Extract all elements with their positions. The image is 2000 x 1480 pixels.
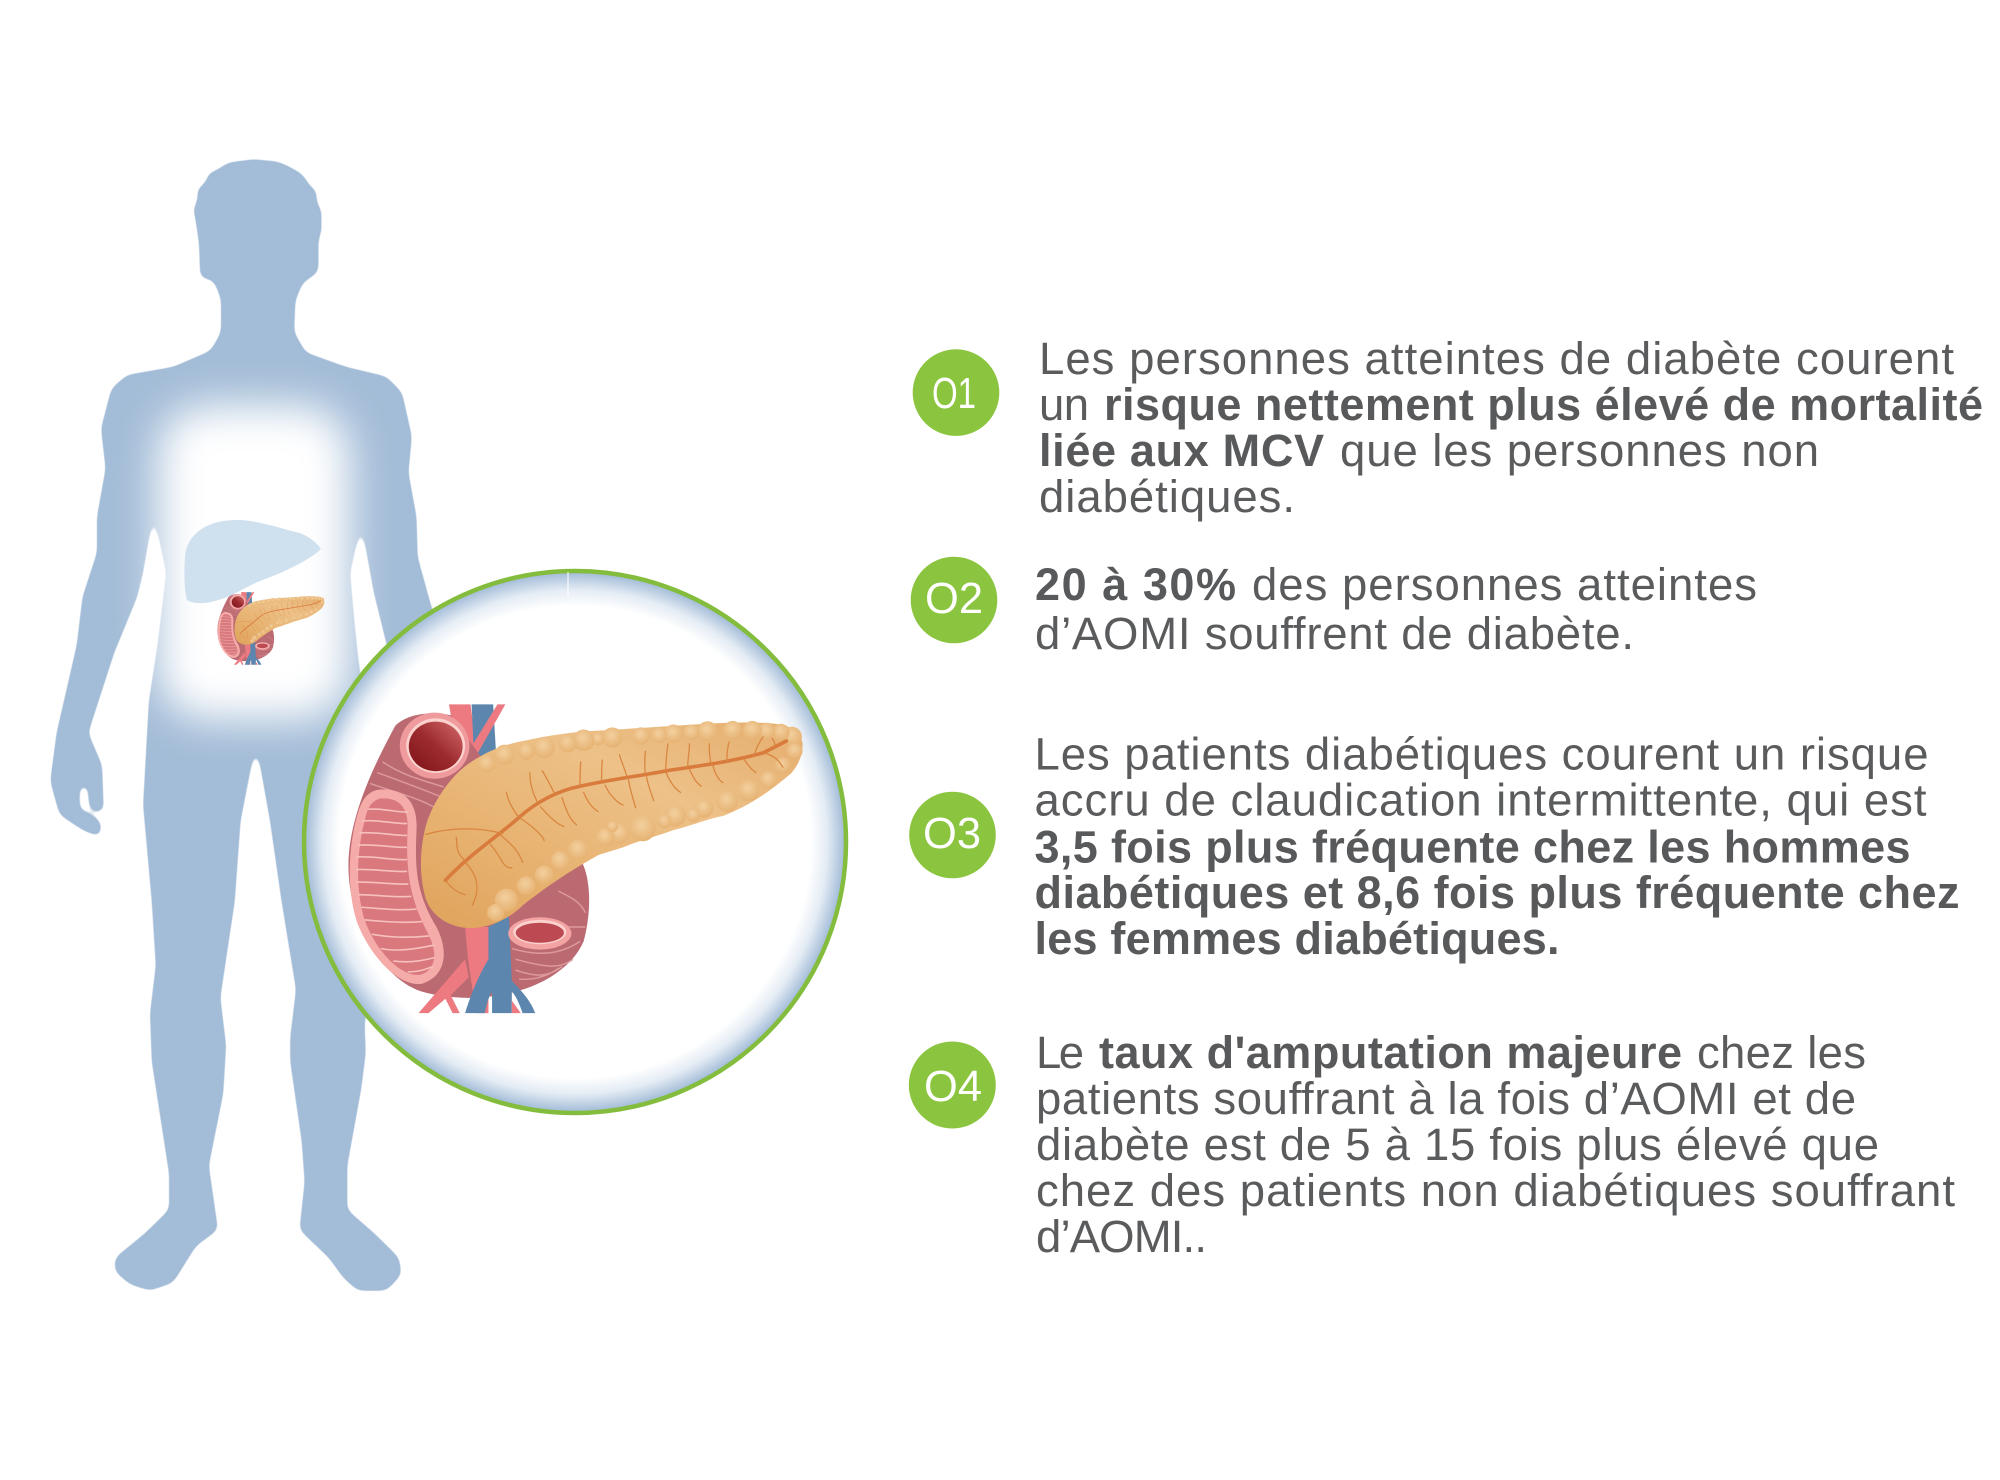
- badge 04: [909, 1042, 996, 1128]
- badge 03: O3: [923, 809, 981, 858]
- text block 01: que les personnes non: [1340, 425, 1819, 476]
- human body silhouette: [50, 159, 462, 1291]
- text block 01: diabétiques.: [1039, 471, 1295, 522]
- upper vessels: [449, 704, 505, 758]
- text block 01: risque nettement plus élevé de mortalité: [1104, 379, 1983, 430]
- small pancreas in body: [217, 592, 324, 665]
- text block 01: un: [1039, 379, 1089, 430]
- enlarged pancreas illustration: [348, 704, 803, 1013]
- text block 01: Les personnes atteintes de diabète courent: [1039, 333, 1954, 384]
- gland lobules: [478, 721, 803, 921]
- text block 03: les femmes diabétiques.: [1034, 913, 1560, 964]
- text block 04: chez les: [1697, 1027, 1866, 1078]
- duodenum lumen: [350, 789, 444, 984]
- badge 02: [911, 557, 997, 643]
- badge 02: O2: [925, 574, 983, 623]
- text block 02: des personnes atteintes: [1252, 559, 1757, 610]
- text block 01: liée aux MCV: [1039, 425, 1324, 476]
- text block 04: taux d'amputation majeure: [1099, 1027, 1682, 1078]
- lower vessel ring: [508, 917, 571, 950]
- badge 01: [913, 349, 999, 436]
- badge 03: [909, 792, 996, 878]
- text block 02: [1035, 559, 1757, 659]
- badge 04: O4: [924, 1062, 982, 1111]
- text block 04: patients souffrant à la fois d’AOMI et de: [1036, 1073, 1856, 1124]
- text block 04: d’AOMI..: [1036, 1211, 1207, 1262]
- torso white glow: [158, 405, 350, 719]
- badge 01: O1: [932, 369, 976, 418]
- magnifier circle: [304, 571, 846, 1113]
- text block 04: chez des patients non diabétiques souffrant: [1036, 1165, 1955, 1216]
- text block 04: Le: [1036, 1027, 1084, 1078]
- liver silhouette: [184, 520, 321, 603]
- upper vessel ring: [400, 713, 469, 779]
- text block 03: Les patients diabétiques courent un risque: [1034, 728, 1928, 780]
- duct branches: [426, 737, 783, 905]
- pancreatic duct: [445, 741, 786, 880]
- lower vessels: [418, 916, 535, 1013]
- text block 03: [1034, 728, 1960, 964]
- pancreas gland: [421, 721, 803, 928]
- text block 03: accru de claudication intermittente, qui est: [1034, 774, 1927, 826]
- text block 03: diabétiques et 8,6 fois plus fréquente chez: [1034, 867, 1960, 918]
- text block 04: diabète est de 5 à 15 fois plus élevé que: [1036, 1119, 1879, 1170]
- text block 02: 20 à 30%: [1035, 559, 1236, 610]
- duodenum body: [348, 714, 589, 998]
- text block 02: d’AOMI souffrent de diabète.: [1035, 608, 1634, 659]
- text block 03: 3,5 fois plus fréquente chez les hommes: [1034, 822, 1910, 872]
- text block 01: [1039, 333, 1983, 522]
- text block 04: [1036, 1027, 1955, 1262]
